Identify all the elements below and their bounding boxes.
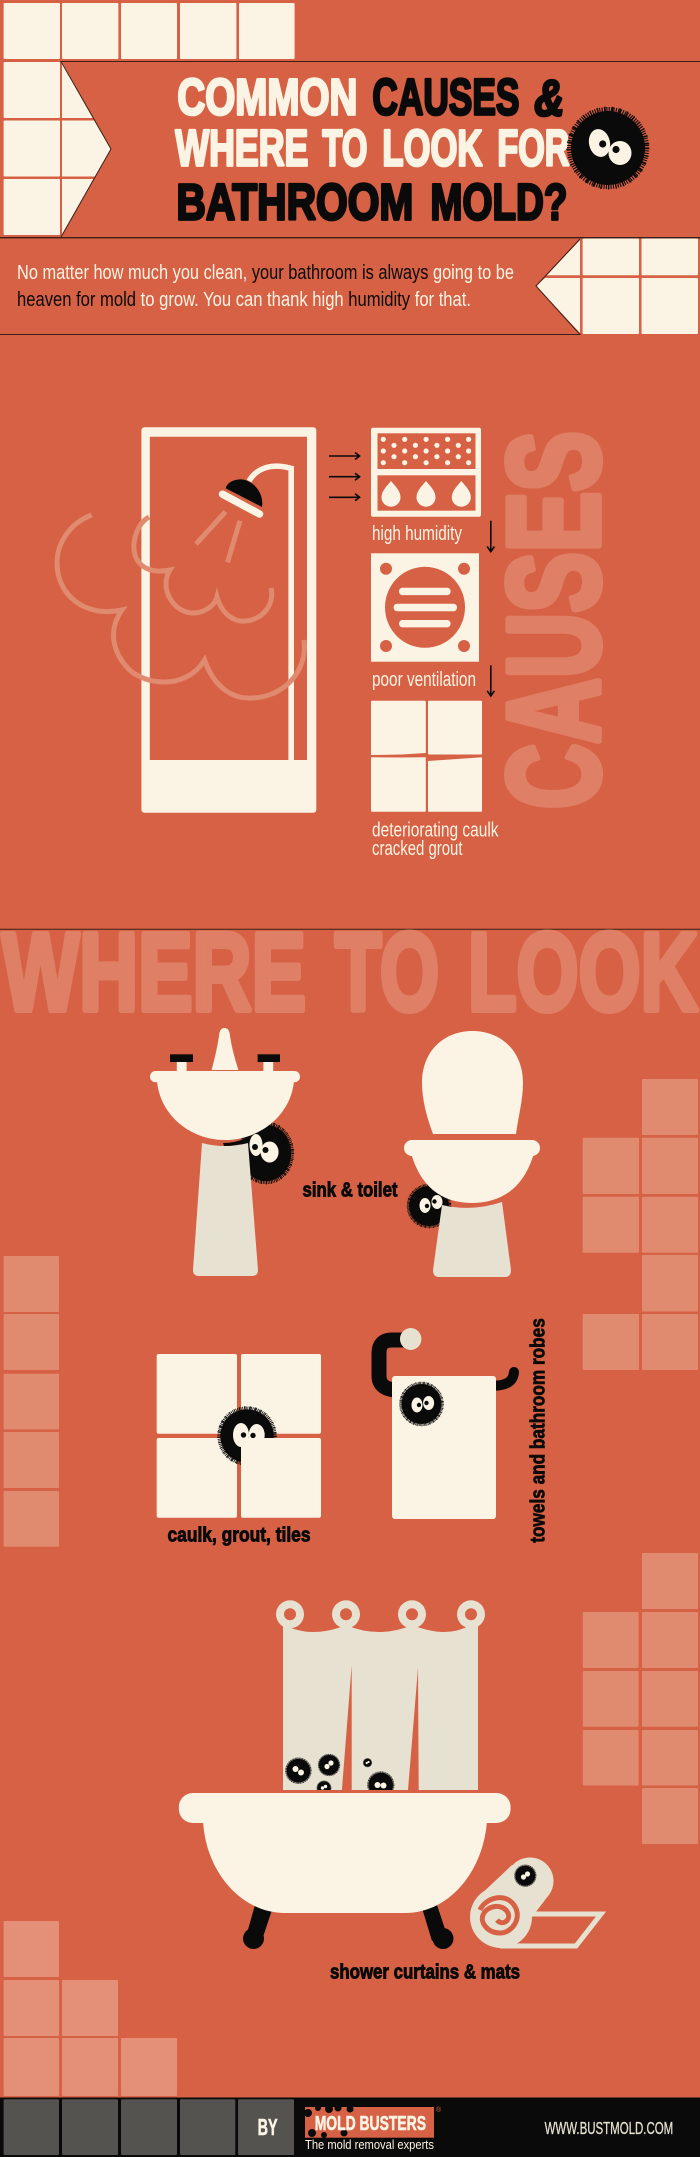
icon: mold mascot header: [569, 109, 647, 187]
intro text: heaven for mold to grow. You can thank high humidity for that.: [17, 289, 471, 311]
illustration: toilet: [404, 1031, 540, 1277]
decorative tiles right lower: [583, 1553, 698, 1844]
handles: [170, 1054, 280, 1072]
title: TO: [322, 120, 367, 177]
label: high humidity: high humidity: [372, 523, 462, 545]
illustration: sink: [150, 1028, 300, 1276]
heading: where to look: WHERE: [2, 911, 306, 1034]
title: &: [534, 70, 564, 127]
icon: high humidity: [371, 428, 481, 517]
title: WHERE: [175, 120, 308, 177]
rail: [379, 1340, 514, 1390]
steam clouds: [57, 515, 304, 698]
title ribbon outline: [0, 62, 700, 238]
arrow: down: [487, 521, 494, 552]
illustration: bathtub and curtain: [179, 1600, 511, 1949]
mold on curtain: [283, 1754, 478, 1798]
label: sink & toilet: sink & toilet: [302, 1179, 398, 1202]
label: poor ventilation: poor ventilation: [372, 669, 476, 691]
footer tiles: [4, 2099, 294, 2155]
bowl: [404, 1140, 540, 1203]
decorative tiles bottom left: [4, 1921, 177, 2096]
intro ribbon outline: [0, 239, 580, 334]
header tiles: [4, 3, 295, 235]
intro text: No matter how much you clean, your bathroom is always going to be: [17, 262, 514, 284]
illustration: shower: [57, 427, 316, 813]
shower head: [222, 479, 262, 514]
logo: mold busters: [304, 2104, 442, 2152]
by label: BY: [258, 2114, 278, 2140]
illustration: tiles with mold: [157, 1354, 321, 1518]
intro tiles: [536, 238, 698, 334]
title: BATHROOM: [176, 174, 413, 231]
illustration: towel on rail: [379, 1328, 514, 1519]
title: LOOK: [382, 120, 483, 177]
intro text: [17, 262, 514, 311]
label: towels and bathroom robes: towels and bathroom robes: [528, 1318, 550, 1543]
title: COMMON: [177, 69, 357, 126]
title: MOLD?: [430, 174, 567, 231]
label: shower curtains & mats: shower curtains & mats: [330, 1961, 520, 1983]
shower stall frame: [141, 427, 316, 813]
heading: where to look: TO: [335, 911, 439, 1034]
tank: [422, 1031, 523, 1134]
arrows: shower to causes: [329, 452, 360, 501]
mold details: [223, 1134, 279, 1162]
mold: [219, 1408, 275, 1464]
shower pipe: [249, 466, 294, 760]
mold behind bowl: [408, 1185, 450, 1227]
logo: mold busters: MOLD BUSTERS: [315, 2113, 426, 2135]
knob: [400, 1328, 421, 1350]
illustration: rolled mat: [470, 1858, 601, 1948]
logo: mold busters: The mold removal experts: [305, 2138, 434, 2152]
mold: [515, 1865, 536, 1886]
label: deteriorating caulk, cracked grout: [372, 820, 499, 860]
mold: [400, 1383, 443, 1425]
label: deteriorating caulk, cracked grout: cracked grout: [372, 838, 463, 860]
roll: [470, 1858, 554, 1948]
pedestal: [433, 1202, 511, 1277]
pedestal: [193, 1143, 258, 1276]
heading: causes: CAUSES: [480, 431, 626, 809]
eyes: [420, 1195, 442, 1213]
decorative tiles right upper: [583, 1079, 698, 1370]
heading: where to look: [2, 911, 698, 1034]
tub body: [179, 1793, 511, 1913]
spiral: [480, 1898, 517, 1933]
towel: [392, 1376, 496, 1519]
mold behind sink: [239, 1123, 293, 1183]
mat outline: [500, 1914, 601, 1946]
label: deteriorating caulk, cracked grout: deteriorating caulk: [372, 820, 499, 842]
label: caulk, grout, tiles: caulk, grout, tiles: [168, 1524, 310, 1547]
basin: [150, 1071, 300, 1140]
footer: [0, 2098, 700, 2157]
icon: ventilation: [371, 553, 479, 662]
title: FOR: [497, 120, 569, 177]
title: CAUSES: [372, 69, 519, 126]
logo: mold busters: ®: [436, 2106, 442, 2114]
tub legs: [243, 1905, 454, 1949]
icon: cracked tiles: [371, 701, 482, 812]
title: [175, 69, 569, 231]
spray lines: [196, 512, 240, 562]
arrow: down: [487, 665, 494, 696]
decorative tiles left: [4, 1256, 59, 1547]
faucet: [212, 1028, 238, 1070]
curtain: [276, 1600, 485, 1790]
